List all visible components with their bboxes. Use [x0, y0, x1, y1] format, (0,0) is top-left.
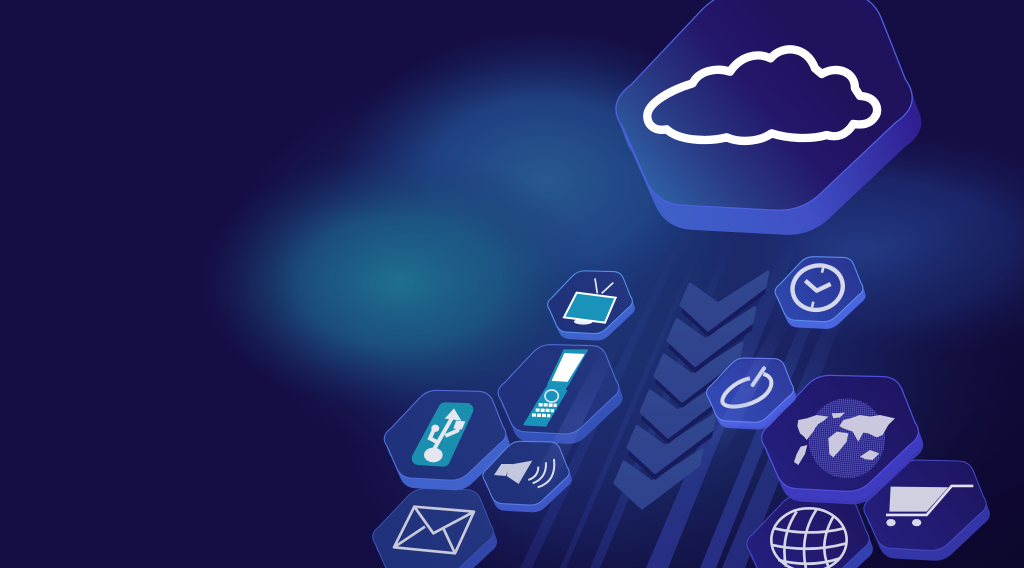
hexagon base — [762, 375, 923, 504]
hexagon base — [747, 495, 873, 568]
icon: shopping cart — [886, 486, 973, 526]
hexagon base — [548, 271, 635, 341]
hexagon: world map — [762, 375, 923, 504]
hexagon base — [864, 460, 990, 561]
icon: clock — [787, 260, 848, 315]
hexagon: cloud — [616, 0, 921, 235]
hexagon base — [384, 390, 510, 490]
icon: envelope — [394, 507, 474, 553]
light rays — [520, 230, 850, 568]
light stripes over hexagons — [522, 320, 790, 500]
hexagon: clock — [775, 257, 866, 329]
icon: power button — [722, 368, 771, 407]
hexagon base — [498, 345, 623, 444]
hexagon base — [483, 441, 572, 512]
icon: usb — [418, 408, 467, 462]
hexagon base — [373, 489, 497, 568]
hexagon: globe — [747, 495, 873, 568]
hexagon base — [775, 257, 866, 329]
chevron arrow — [615, 272, 768, 508]
icon: phone — [524, 350, 587, 426]
hexagon: mail — [373, 489, 497, 568]
icon: television — [564, 278, 616, 325]
hexagon base — [707, 358, 796, 430]
hexagon base — [616, 0, 921, 235]
hexagon: power — [707, 358, 796, 430]
hexagon: usb — [384, 390, 510, 490]
icon: wire globe — [771, 508, 847, 568]
icon: speaker — [494, 459, 554, 487]
hexagon: speaker — [483, 441, 572, 512]
icon: world map — [794, 398, 895, 478]
hexagon: cart — [864, 460, 990, 561]
hexagon: phone — [498, 345, 623, 444]
hexagon: tv — [548, 271, 635, 341]
icon: cloud — [647, 49, 877, 141]
